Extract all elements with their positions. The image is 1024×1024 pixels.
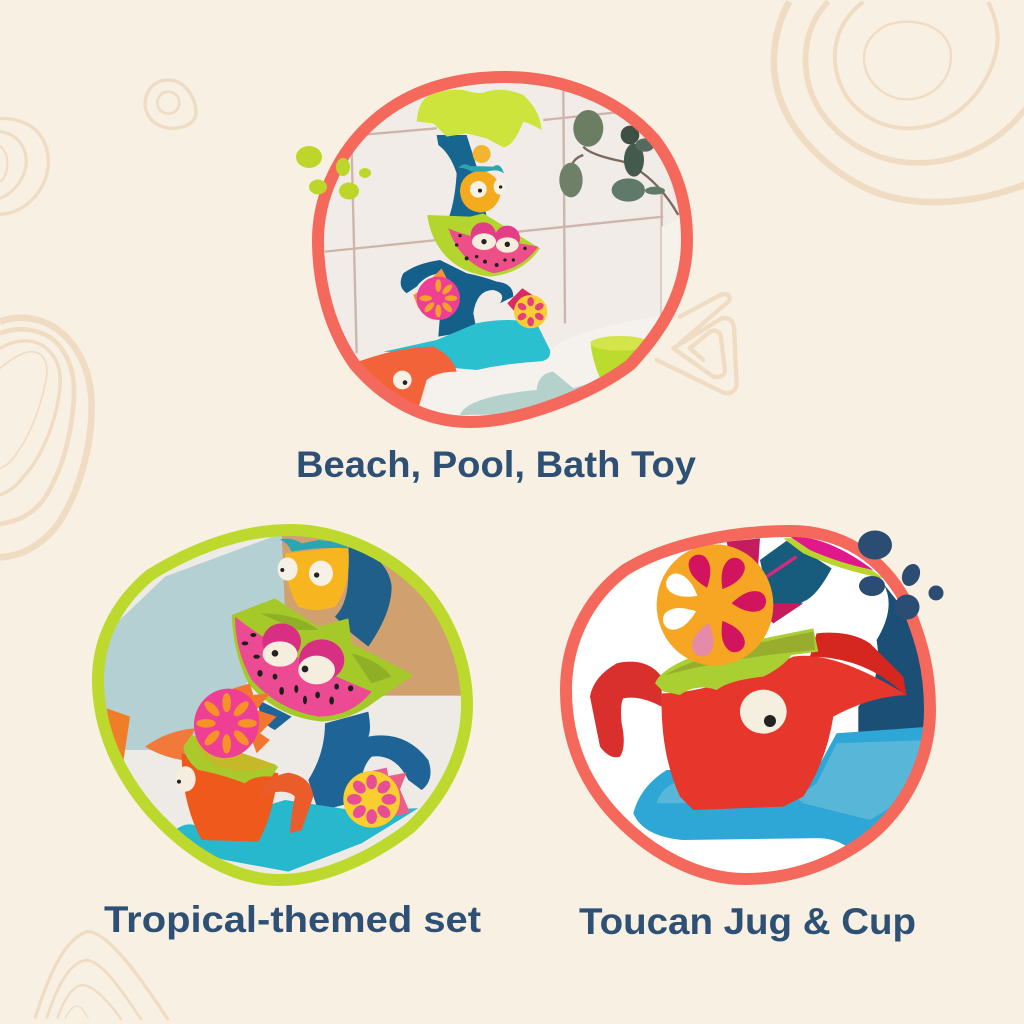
tile wall [290, 60, 723, 427]
palm leaves [417, 90, 542, 147]
dark teal upper trunk [760, 538, 832, 623]
pineapple [473, 145, 491, 163]
lime dots [296, 146, 371, 200]
jug lime rim [655, 628, 818, 695]
tray [633, 727, 930, 847]
green cup [590, 341, 636, 378]
teal towel fold [460, 372, 588, 415]
panel: beach, pool, bath toy photo [312, 71, 693, 428]
caption: tropical-themed set: Tropical-themed set [104, 899, 481, 940]
pink wheel [194, 683, 277, 758]
decorative contour lines: bottom left [35, 932, 168, 1020]
wood backdrop [282, 536, 461, 696]
vase [662, 226, 663, 313]
watermelon edge [783, 538, 883, 578]
decorative triangle contour [657, 294, 737, 393]
jug handle [590, 662, 662, 757]
magenta pieces behind wheel [727, 538, 803, 623]
decorative contour lines: top right [774, 2, 1024, 202]
pineapple [285, 547, 349, 610]
blob outline [318, 77, 687, 422]
eye [740, 690, 787, 734]
panel: tropical-themed set photo [85, 520, 485, 887]
dark trunk [858, 585, 924, 732]
tray [383, 320, 550, 370]
caption: toucan jug and cup: Toucan Jug & Cup [579, 901, 916, 942]
wheel [657, 544, 773, 666]
blob outline [566, 531, 930, 879]
towel [418, 316, 663, 417]
left orange toy [107, 708, 130, 762]
blob outline [98, 530, 467, 880]
trunk lower [308, 712, 431, 812]
pale blue board [104, 536, 285, 750]
trunk upper [335, 540, 392, 647]
jug body [662, 656, 907, 810]
yellow wheel [343, 768, 410, 828]
panel: toucan jug and cup photo [550, 520, 950, 890]
decorative contour lines: top left [0, 80, 196, 214]
orange jug [145, 728, 195, 760]
trunk lower [401, 260, 513, 337]
jug lime rim [183, 735, 278, 783]
navy dots [858, 530, 944, 620]
toucan head [358, 347, 457, 408]
yellow wheel [507, 288, 547, 328]
watermelon [232, 598, 413, 722]
tray [172, 800, 418, 872]
jug beak top [810, 633, 907, 697]
trunk upper [437, 135, 487, 223]
caption: beach, pool, bath toy: Beach, Pool, Bath Toy [296, 444, 696, 485]
watermelon [427, 213, 540, 277]
decorative contour lines: left middle [0, 318, 92, 557]
plant [559, 110, 678, 215]
pink wheel [413, 268, 460, 320]
